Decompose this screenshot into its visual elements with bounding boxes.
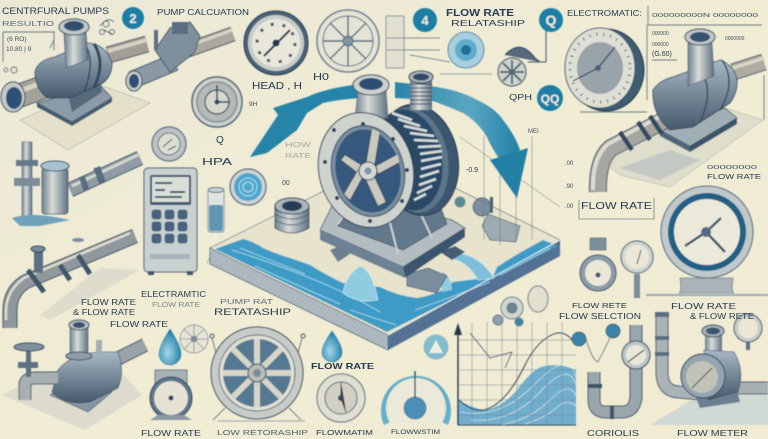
labels: top right: MEI (528, 129, 539, 135)
left stacked pipe assembly (12, 142, 140, 226)
labels: top left: HOW (285, 142, 312, 149)
gauge: crosshair dial (192, 77, 242, 127)
waterfall left (343, 266, 378, 301)
labels: bottom left: FLOW RATE (141, 429, 201, 438)
labels: top left: HEAD , H (252, 80, 302, 92)
labels: top left: H0 (313, 72, 330, 83)
left mid pipe with valves (6, 233, 140, 328)
labels: top right: 000000 (652, 42, 669, 48)
labels: top right: .90 (565, 184, 574, 190)
labels: bottom right: & FLOW RETE (690, 312, 754, 321)
small twin gauges (580, 238, 653, 298)
platform sketch lines (455, 135, 560, 245)
waterfall right (450, 252, 494, 280)
small annotation rings near chart (493, 286, 548, 326)
labels: top right: RELATASHIP (451, 18, 525, 28)
labels: top left: Q (216, 135, 224, 146)
water channel (215, 239, 558, 332)
badge: number 2 (122, 7, 144, 29)
labels: bottom right: CORIOLIS (587, 429, 639, 438)
impeller (341, 128, 400, 206)
labels: top right: .00 (565, 161, 574, 167)
labels: top right: FLOW RATE (581, 201, 652, 212)
labels: top left: RATE (285, 153, 311, 160)
round flowmeter dial (317, 374, 365, 422)
test tube cylinder (208, 188, 224, 232)
wheel dial sketch (317, 10, 379, 72)
platform right side (388, 240, 560, 350)
labels: top right: FLOW RATE (446, 8, 514, 19)
labels: top right: QPH (509, 93, 532, 102)
badge: QQ: QQ (541, 92, 559, 106)
machinery right of pump (473, 198, 491, 216)
labels: bottom right: FLOWWSTIM (391, 430, 440, 436)
labels: top right: 000000 (652, 31, 669, 37)
labels: bottom left: PUMP RAT (220, 297, 274, 306)
blue target dial (230, 169, 266, 205)
pump illustration: right pump (593, 29, 764, 192)
labels: top right (446, 8, 761, 219)
labels: top right: 0000000 (725, 36, 745, 42)
platform top (210, 188, 560, 335)
labels: bottom left: LOW RETORASHIP (217, 428, 308, 437)
labels: top right: (G.60) (652, 51, 672, 58)
top right annotation frame (580, 6, 764, 120)
labels: top left: HPA (202, 157, 232, 168)
badge: number 2: 2 (129, 11, 137, 26)
blue curved flow arrow (250, 82, 528, 198)
large bottom right gauge (646, 186, 768, 295)
annotations: top left sketch frame (3, 20, 114, 73)
labels: top right: -0.9 (466, 167, 478, 174)
platform left side (210, 248, 388, 350)
labels: bottom right: FLOW RETE (572, 303, 627, 310)
labels: bottom right (391, 302, 754, 438)
labels: bottom left: RETATASHIP (214, 307, 291, 317)
water drop left (159, 329, 181, 365)
pump base (320, 190, 465, 278)
labels: top left: PUMP CALCUATION (157, 8, 249, 17)
labels: top right: .00 (565, 204, 574, 210)
mini fall (436, 272, 452, 292)
pump illustration: second top pump with valves (126, 22, 233, 91)
labels: top left (2, 6, 330, 187)
labels: bottom left: ELECTRAMTIC (141, 290, 206, 299)
labels: top right: ELECTROMATIC: (567, 9, 642, 18)
flanged inlet (353, 75, 389, 118)
large flow wheel (210, 327, 305, 421)
isometric platform (210, 135, 560, 350)
labels: top left: CENTRFURAL PUMPS (2, 6, 109, 16)
small blue dial (440, 32, 492, 74)
labels: bottom right: FLOW SELCTION (559, 312, 641, 321)
large right gauge (565, 28, 644, 111)
mini impeller schematic (498, 30, 546, 86)
small ring cylinder (275, 198, 309, 233)
labels: bottom left: FLOW RATE (152, 300, 200, 309)
water drop right (322, 331, 342, 362)
labels: top right: 00000000 (707, 165, 757, 171)
flow chart with curves (454, 322, 576, 425)
rectangular-top gauge (150, 370, 192, 420)
rear ribbed casing (366, 98, 467, 222)
gearbox on platform (407, 268, 447, 293)
badge: Q: Q (546, 12, 557, 28)
labels: bottom right: FLOW RATE (671, 302, 736, 311)
threaded pipe (409, 71, 433, 110)
flow meter pump (650, 312, 768, 425)
gauge: large top dial (244, 11, 308, 75)
labels: bottom left: FLOW RATE (81, 298, 136, 307)
pump illustration: lower left (2, 320, 145, 430)
badge: number 4: 4 (421, 13, 429, 28)
badge: Q (539, 8, 563, 32)
calculator device (144, 168, 197, 275)
labels: top right: FLOW RATE (707, 174, 761, 181)
pump illustration: top left centrifugal pump (1, 19, 150, 150)
labels: top left: 9H (249, 101, 258, 108)
labels: top right: 000000000N 00000000 (652, 13, 758, 19)
labels: bottom left: & FLOW RATE (73, 308, 135, 317)
labels: top left: (6 RO) (7, 36, 26, 43)
labels: bottom left (73, 290, 374, 438)
small spoked wheel sketch (180, 325, 208, 353)
labels: bottom left: FLOW RATE (311, 361, 374, 371)
front flange ring (306, 102, 426, 238)
triangle badge (424, 335, 448, 359)
central centrifugal pump (306, 71, 467, 278)
labels: top left: 10.80 | 9 (6, 46, 32, 53)
labels: bottom right: FLOW METER (677, 429, 748, 438)
Coriolis U pipe with gauge (572, 324, 650, 419)
labels: top left: 00 (282, 180, 290, 187)
labels: bottom left: FLOWMATIM (316, 428, 373, 437)
left small sketch panel near 4 (386, 16, 450, 68)
small coin gauge (152, 127, 186, 161)
labels: bottom left: FLOW RATE (110, 320, 168, 329)
labels: top left: RESULTIO (2, 19, 54, 28)
badge: number 4 (413, 8, 437, 32)
badge: QQ (537, 85, 563, 111)
semicircular gauge with ball (381, 371, 451, 425)
